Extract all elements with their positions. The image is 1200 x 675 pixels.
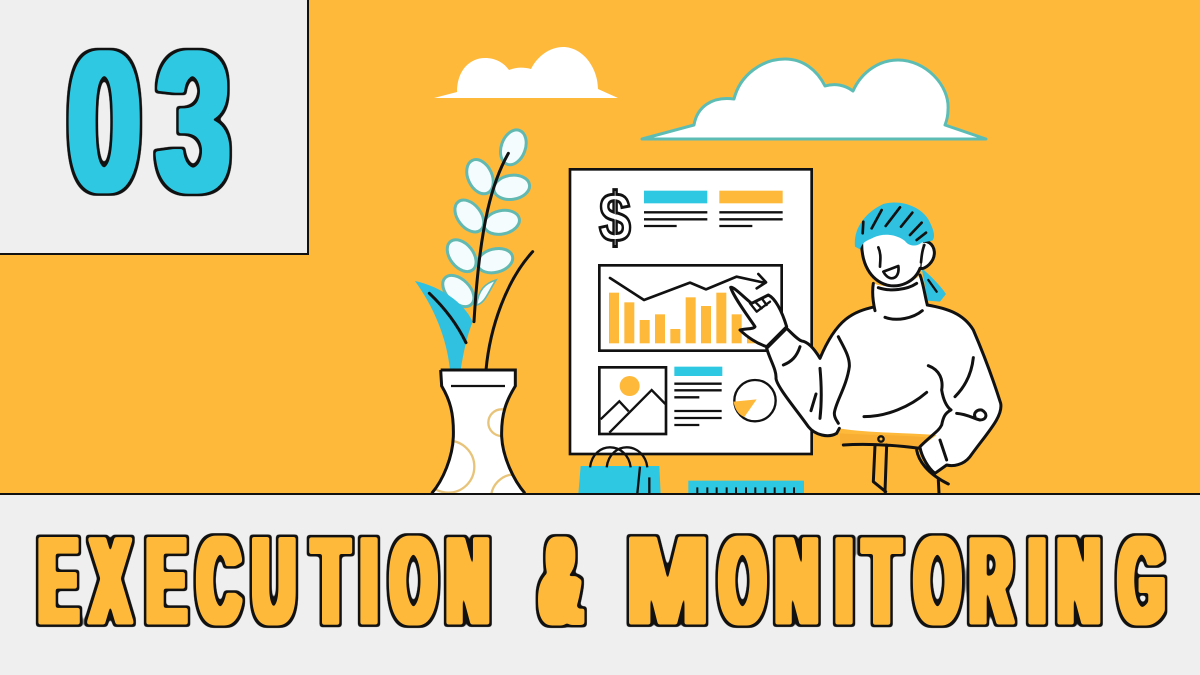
dollar icon: $	[599, 178, 631, 257]
bar and line chart	[599, 265, 782, 351]
cyan leaf	[415, 281, 473, 370]
title: M	[627, 513, 708, 650]
vase	[430, 368, 526, 493]
ponytail	[922, 268, 946, 302]
orange background	[0, 0, 1200, 494]
cyan text block	[644, 191, 707, 226]
lower text block	[674, 367, 722, 425]
pointing hand	[731, 287, 787, 347]
report board	[570, 169, 812, 454]
pie chart	[734, 380, 776, 421]
landscape picture icon	[599, 367, 666, 434]
plant stems	[429, 153, 533, 370]
ground line	[0, 493, 1200, 495]
shopping bag	[578, 447, 661, 494]
person pointing at the chart	[731, 203, 1001, 493]
potted plant	[415, 128, 534, 493]
ruler	[688, 481, 804, 494]
sweater folds	[783, 337, 986, 484]
neck lines	[873, 275, 927, 319]
title: EXECUTION &	[39, 513, 582, 650]
head	[855, 203, 934, 286]
sweater	[767, 305, 1001, 473]
large cloud	[642, 59, 986, 139]
trousers	[840, 433, 940, 493]
yellow text block	[719, 191, 783, 226]
section number: 03	[68, 11, 230, 232]
turtleneck	[873, 275, 927, 311]
title	[39, 513, 1164, 650]
small cloud	[434, 47, 618, 98]
plant leaves	[437, 126, 531, 312]
number panel	[0, 0, 308, 254]
bottom band	[0, 494, 1200, 675]
title: ONITORING	[720, 513, 1164, 650]
